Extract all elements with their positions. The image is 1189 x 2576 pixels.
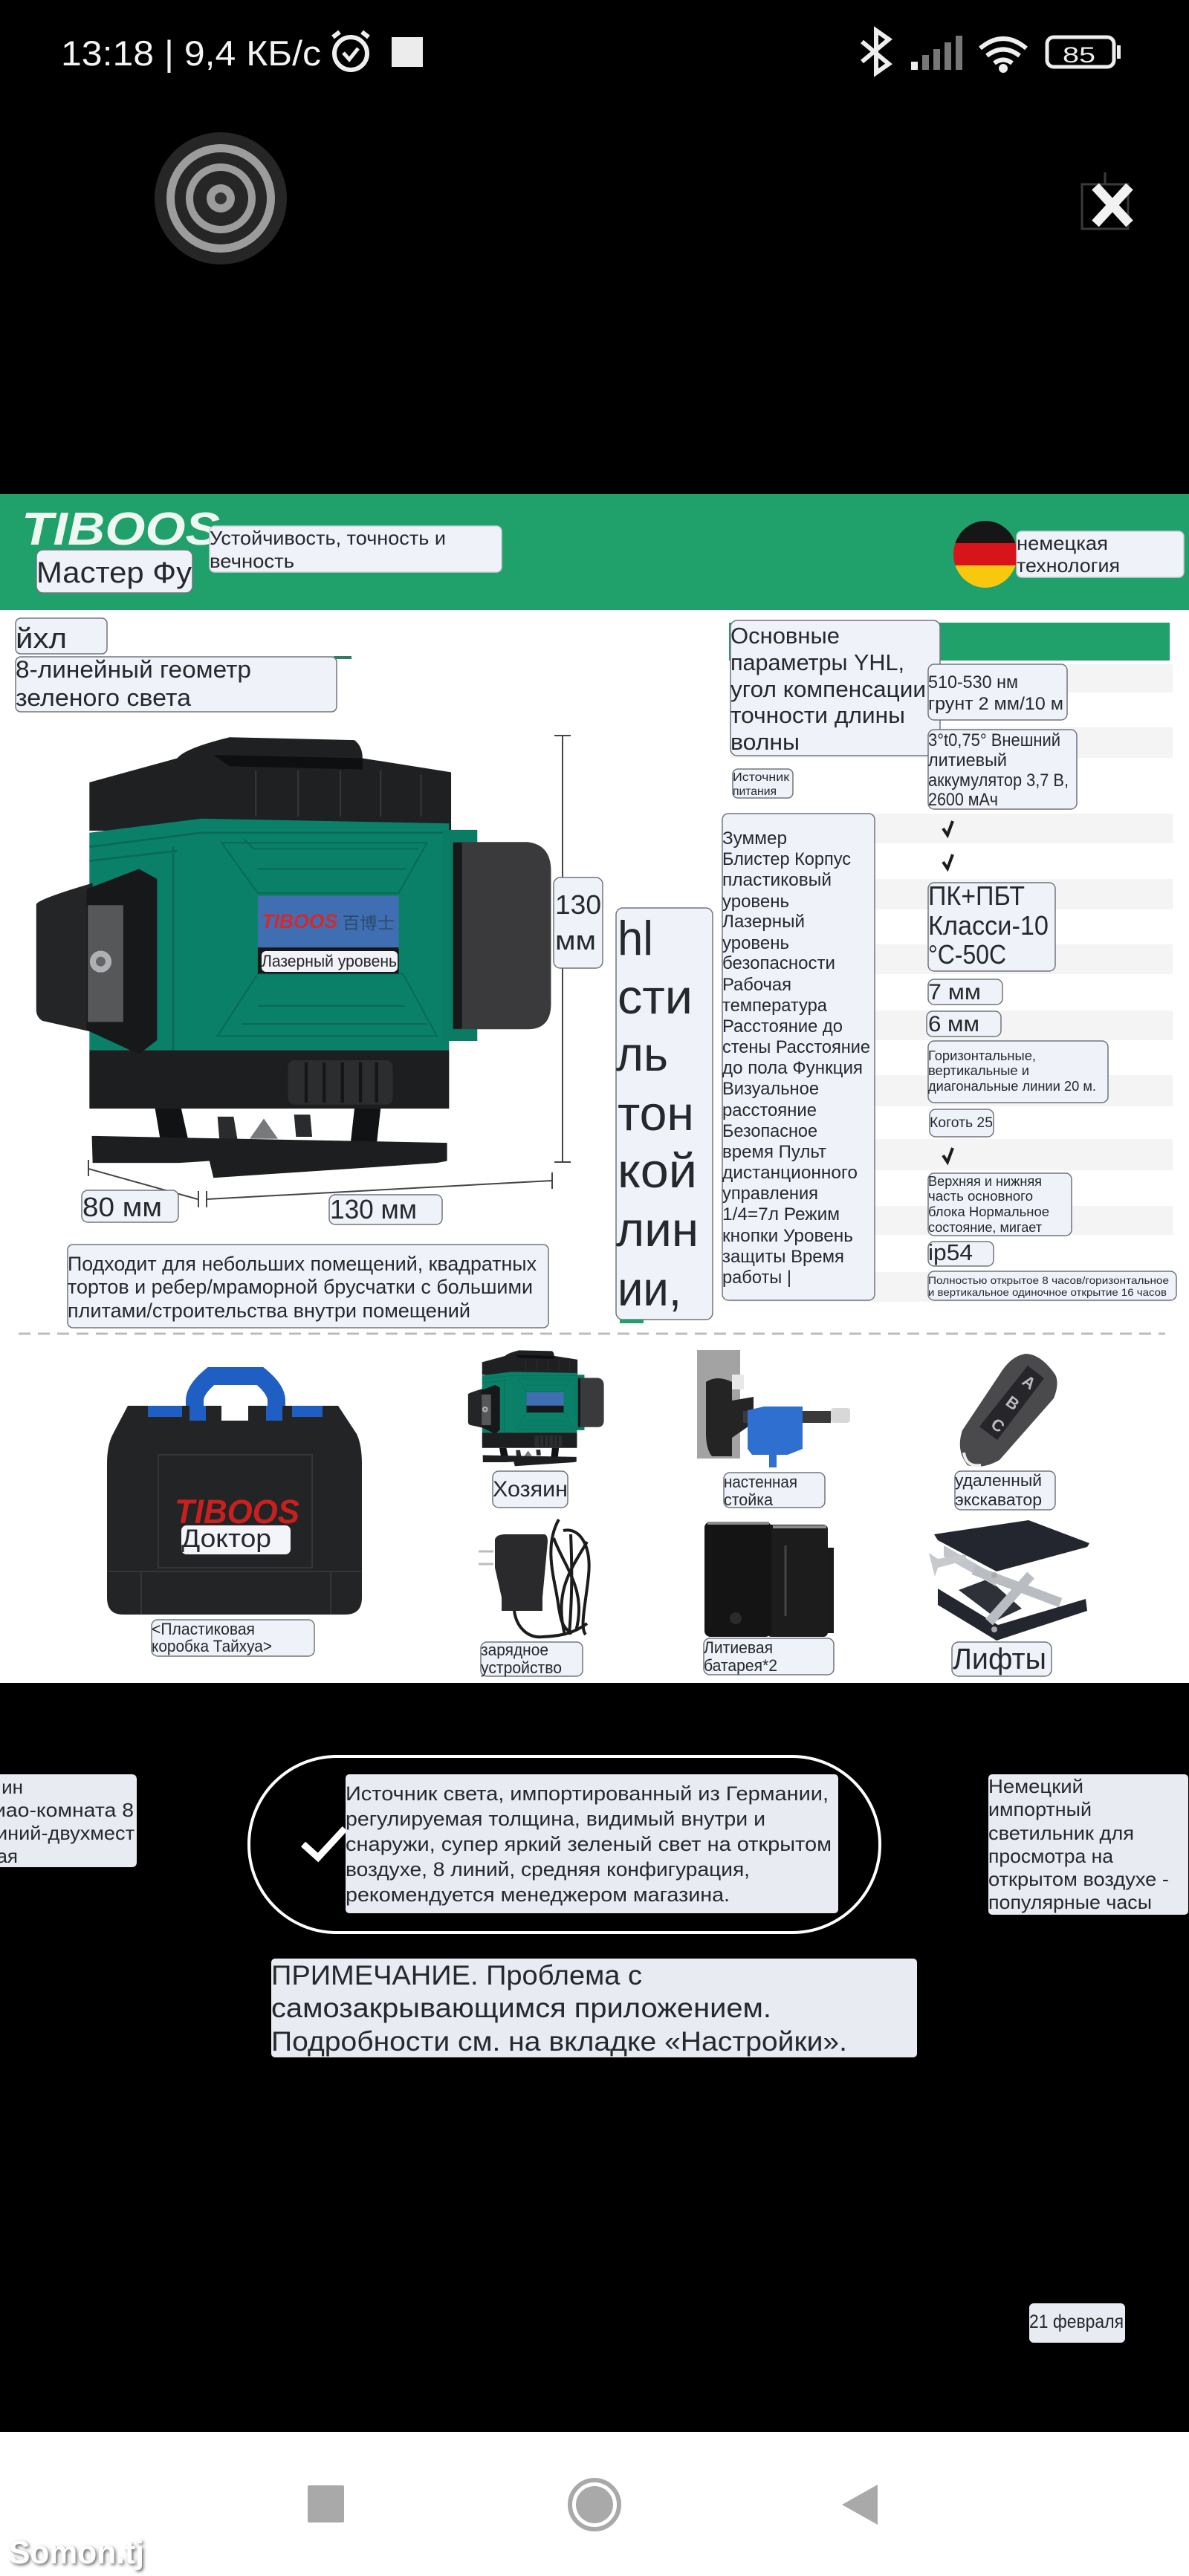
label: product type: 8-линейный геометр	[16, 656, 251, 683]
spec labels column: время Пульт	[722, 1142, 826, 1162]
spec labels column: Расстояние до	[722, 1016, 843, 1036]
text: right box imported light: Немецкий	[988, 1775, 1083, 1797]
label: height 130 mm	[554, 877, 603, 968]
spec value: safety time	[930, 1109, 994, 1137]
spec labels column: расстояние	[722, 1100, 817, 1120]
spec labels column: защиты Время	[722, 1247, 844, 1267]
label: battery: батарея*2	[704, 1656, 777, 1675]
spec value: wall distance: 7 мм	[928, 980, 981, 1005]
accessories section	[107, 1350, 1089, 1677]
spec value: line functions: вертикальные и	[928, 1063, 1029, 1078]
icon: battery 85: 85	[1063, 43, 1095, 68]
spec value: body and temperature: Класси-10	[928, 910, 1049, 941]
icon: check remote	[943, 1148, 953, 1162]
spec value: compensation and battery: 2600 мАч	[928, 790, 998, 810]
table row stripes	[730, 664, 1173, 1302]
device badge logo: 百博士	[343, 913, 395, 932]
spec value: line functions: Горизонтальные,	[928, 1048, 1036, 1063]
icon: check mark	[303, 1829, 345, 1858]
icon: close and share	[1082, 172, 1130, 229]
icon: check blister	[943, 854, 953, 869]
label: remote	[955, 1471, 1055, 1510]
text: large narrow column	[616, 908, 713, 1323]
label: charger: зарядное	[481, 1641, 548, 1659]
spec value: safety time: Коготь 25	[930, 1115, 993, 1131]
brand logo: TIBOOS	[22, 504, 220, 555]
spec labels column: пластиковый	[722, 870, 832, 890]
text: large narrow column: лин	[616, 1202, 699, 1256]
spec labels column: до пола Функция	[722, 1058, 863, 1078]
spec labels column: Лазерный	[722, 912, 805, 932]
spec value: protection: ip54	[928, 1239, 973, 1265]
text: large narrow column: кой	[618, 1143, 697, 1198]
illustration: remote control	[960, 1354, 1057, 1467]
illustration: wall mount	[697, 1350, 850, 1467]
spec value: line functions	[928, 1041, 1108, 1103]
text: left cropped box: ин	[1, 1776, 23, 1798]
spec labels column: уровень	[722, 892, 789, 912]
spec value: line functions: диагональные линии 20 м.	[928, 1079, 1096, 1094]
label: laser level badge: Лазерный уровень	[262, 952, 397, 970]
illustration: main unit	[468, 1350, 604, 1466]
spec labels column	[722, 814, 875, 1300]
icon: nav home	[570, 2480, 619, 2529]
label: german technology: технология	[1017, 554, 1120, 577]
spec label: power source	[733, 769, 793, 798]
text: right box imported light: просмотра на	[988, 1845, 1114, 1867]
label: slogan: вечность	[210, 550, 294, 572]
spec value: wavelength and accuracy	[928, 664, 1067, 720]
illustration: lift table	[929, 1520, 1089, 1641]
specs table	[722, 620, 1176, 1302]
label: model	[16, 618, 107, 655]
text: note: самозакрывающимся приложением.	[271, 1993, 771, 2023]
spec labels column: температура	[722, 996, 828, 1016]
label: lifts: Лифты	[953, 1643, 1046, 1675]
spec value: compensation and battery: аккумулятор 3,7 В,	[928, 770, 1069, 791]
spec labels column: управления	[722, 1184, 818, 1204]
illustration: remote control: B	[1002, 1392, 1023, 1414]
spec value: key mode	[928, 1173, 1072, 1236]
text: note	[271, 1959, 917, 2057]
text: light source description: Источник света, импортированный из Германии,	[346, 1782, 829, 1805]
spec labels column: стены Расстояние	[722, 1037, 870, 1057]
spec value: run time: и вертикальное одиночное открытие 16 часов	[928, 1286, 1167, 1298]
label: remote: удаленный	[955, 1471, 1042, 1490]
label: product type: зеленого света	[16, 684, 191, 711]
device badge logo: TIBOOS	[262, 909, 337, 932]
spec labels column: Зуммер	[722, 828, 787, 849]
text: note: Подробности см. на вкладке «Настройки».	[271, 2026, 847, 2057]
spec labels column: Блистер Корпус	[722, 849, 851, 869]
spec value: floor distance: 6 мм	[928, 1012, 979, 1036]
label: battery	[704, 1638, 834, 1675]
icon: bluetooth	[862, 30, 889, 73]
spec value: key mode: часть основного	[928, 1189, 1033, 1204]
watermark: Somon.tj	[9, 2534, 144, 2571]
label: wall mount: стойка	[724, 1490, 774, 1509]
label: slogan: Устойчивость, точность и	[210, 527, 446, 549]
table header bar	[729, 623, 1170, 661]
header band	[0, 494, 1189, 610]
illustration: lithium battery	[704, 1522, 834, 1637]
illustration: plastic case	[107, 1376, 362, 1615]
label: charger: устройство	[481, 1658, 562, 1677]
spec value: body and temperature: °C-50C	[928, 939, 1006, 970]
spec labels column: Рабочая	[722, 975, 791, 995]
icon: nav back	[842, 2485, 878, 2525]
text: light source description: рекомендуется менеджером магазина.	[346, 1884, 730, 1906]
text: light source description: воздухе, 8 линий, средняя конфигурация,	[346, 1858, 750, 1881]
spec value: compensation and battery	[928, 730, 1077, 810]
text: light source description: снаружи, супер яркий зеленый свет на открытом	[346, 1833, 832, 1855]
illustration: charger	[479, 1519, 589, 1637]
spec value: key mode: блока Нормальное	[928, 1204, 1049, 1219]
label: plastic box: <Пластиковая	[152, 1620, 255, 1638]
label: height 130 mm: 130	[555, 889, 601, 920]
text: large narrow column: сти	[618, 970, 693, 1024]
label: depth 80 mm: 80 мм	[82, 1192, 162, 1222]
laser level illustration	[36, 737, 551, 1178]
spec value: wavelength and accuracy: грунт 2 мм/10 м	[928, 694, 1063, 714]
icon: battery 85	[1047, 37, 1121, 68]
status bar	[61, 30, 1121, 73]
spec value: protection	[928, 1239, 994, 1266]
text: note: ПРИМЕЧАНИЕ. Проблема с	[271, 1960, 642, 1991]
text: large narrow column: ль	[616, 1027, 668, 1081]
text: right box imported light	[988, 1774, 1188, 1915]
text: usage description: тортов и ребер/мраморной брусчатки с большими	[68, 1276, 533, 1298]
illustration: plastic case: TIBOOS	[175, 1493, 299, 1531]
dimension: height	[554, 736, 571, 1162]
label: main unit: Хозяин	[493, 1477, 568, 1502]
spec value: run time	[928, 1271, 1176, 1300]
spec labels column: уровень	[722, 933, 789, 953]
spec heading: точности длины	[730, 702, 905, 728]
spec heading: параметры YHL,	[730, 649, 904, 675]
text: usage description	[68, 1245, 548, 1328]
text: large narrow column: hl	[618, 911, 653, 965]
spec value: floor distance	[927, 1011, 1001, 1036]
spec value: key mode: состояние, мигает	[928, 1220, 1042, 1235]
product title	[16, 618, 351, 712]
icon: alarm	[333, 32, 369, 70]
spec labels column: Визуальное	[722, 1079, 819, 1099]
spec labels column: 1/4=7л Режим	[722, 1204, 840, 1224]
spec heading: Основные	[730, 623, 840, 649]
spec labels column: кнопки Уровень	[722, 1226, 853, 1246]
spec heading: угол компенсации	[730, 676, 926, 702]
text: right box imported light: популярные часы	[988, 1891, 1152, 1913]
spec heading	[730, 620, 940, 756]
label: german technology: немецкая	[1017, 532, 1108, 554]
label: german technology	[1017, 531, 1184, 577]
text: light source description	[346, 1774, 838, 1913]
icon: wifi	[980, 39, 1026, 71]
label: width 130 mm: 130 мм	[330, 1194, 417, 1224]
spec heading: волны	[730, 729, 800, 755]
text: left cropped box	[0, 1774, 137, 1867]
illustration: remote control: A	[1019, 1372, 1040, 1393]
label: slogan	[210, 526, 502, 572]
text: date: 21 февраля	[1029, 2311, 1124, 2332]
spec label: power source: Источник	[733, 771, 790, 784]
dimension: depth and width lines	[88, 1160, 552, 1207]
spec value: compensation and battery: литиевый	[928, 750, 1007, 770]
text: usage description: Подходит для небольших помещений, квадратных	[68, 1253, 537, 1275]
label: wall mount: настенная	[724, 1473, 797, 1491]
spec value: compensation and battery: 3°t0,75° Внешний	[928, 730, 1060, 750]
label: height 130 mm: мм	[555, 925, 596, 956]
text: right box imported light: светильник для	[988, 1822, 1134, 1844]
label: charger	[481, 1641, 583, 1677]
label: plastic box	[152, 1620, 314, 1656]
label: wall mount	[724, 1473, 825, 1509]
callout: light source pill	[249, 1756, 880, 1933]
spec labels column: безопасности	[722, 953, 835, 973]
label: doctor: Доктор	[181, 1525, 271, 1553]
label: remote: экскаватор	[955, 1490, 1042, 1509]
label: battery: Литиевая	[704, 1638, 773, 1657]
text: large narrow column: ии,	[618, 1262, 681, 1316]
spec labels column: дистанционного	[722, 1163, 858, 1183]
label: product type	[16, 656, 337, 712]
icon: german flag	[953, 521, 1017, 588]
spec value: run time: Полностью открытое 8 часов/горизонтальное	[928, 1274, 1169, 1286]
icon: check buzzer	[943, 821, 953, 835]
text: usage description: плитами/строительства внутри помещений	[68, 1300, 470, 1322]
icon: nav square	[308, 2485, 344, 2523]
spec labels column: Безопасное	[722, 1121, 817, 1141]
spec label: power source: питания	[733, 785, 777, 798]
spec value: key mode: Верхняя и нижняя	[928, 1174, 1042, 1189]
text: light source description: регулируемая толщина, видимый внутри и	[346, 1808, 765, 1830]
icon: square	[392, 37, 423, 67]
text: right box imported light: импортный	[988, 1798, 1092, 1820]
status time and speed: 13:18 | 9,4 КБ/с	[61, 33, 321, 73]
illustration: remote control: C	[988, 1415, 1008, 1436]
device badge logo	[262, 909, 395, 932]
icon: signal	[911, 36, 962, 70]
label: brand name: Мастер Фу	[36, 557, 192, 589]
spec value: wavelength and accuracy: 510-530 нм	[928, 672, 1018, 692]
spec value: body and temperature: ПК+ПБТ	[928, 880, 1025, 911]
label: main unit	[493, 1471, 568, 1508]
text: large narrow column: тон	[618, 1086, 694, 1141]
spec labels column: работы |	[722, 1268, 791, 1288]
text: right box imported light: открытом воздухе -	[988, 1868, 1169, 1890]
spec value: body and temperature	[928, 880, 1055, 971]
label: model: йхл	[16, 623, 67, 655]
text: left cropped box: иний-двухмест	[0, 1822, 135, 1844]
text: date	[1029, 2303, 1125, 2343]
label: plastic box: коробка Тайхуа>	[152, 1637, 272, 1655]
icon: target button	[155, 132, 287, 265]
spec value: wall distance	[928, 979, 1002, 1005]
navigation bar	[308, 2480, 878, 2529]
